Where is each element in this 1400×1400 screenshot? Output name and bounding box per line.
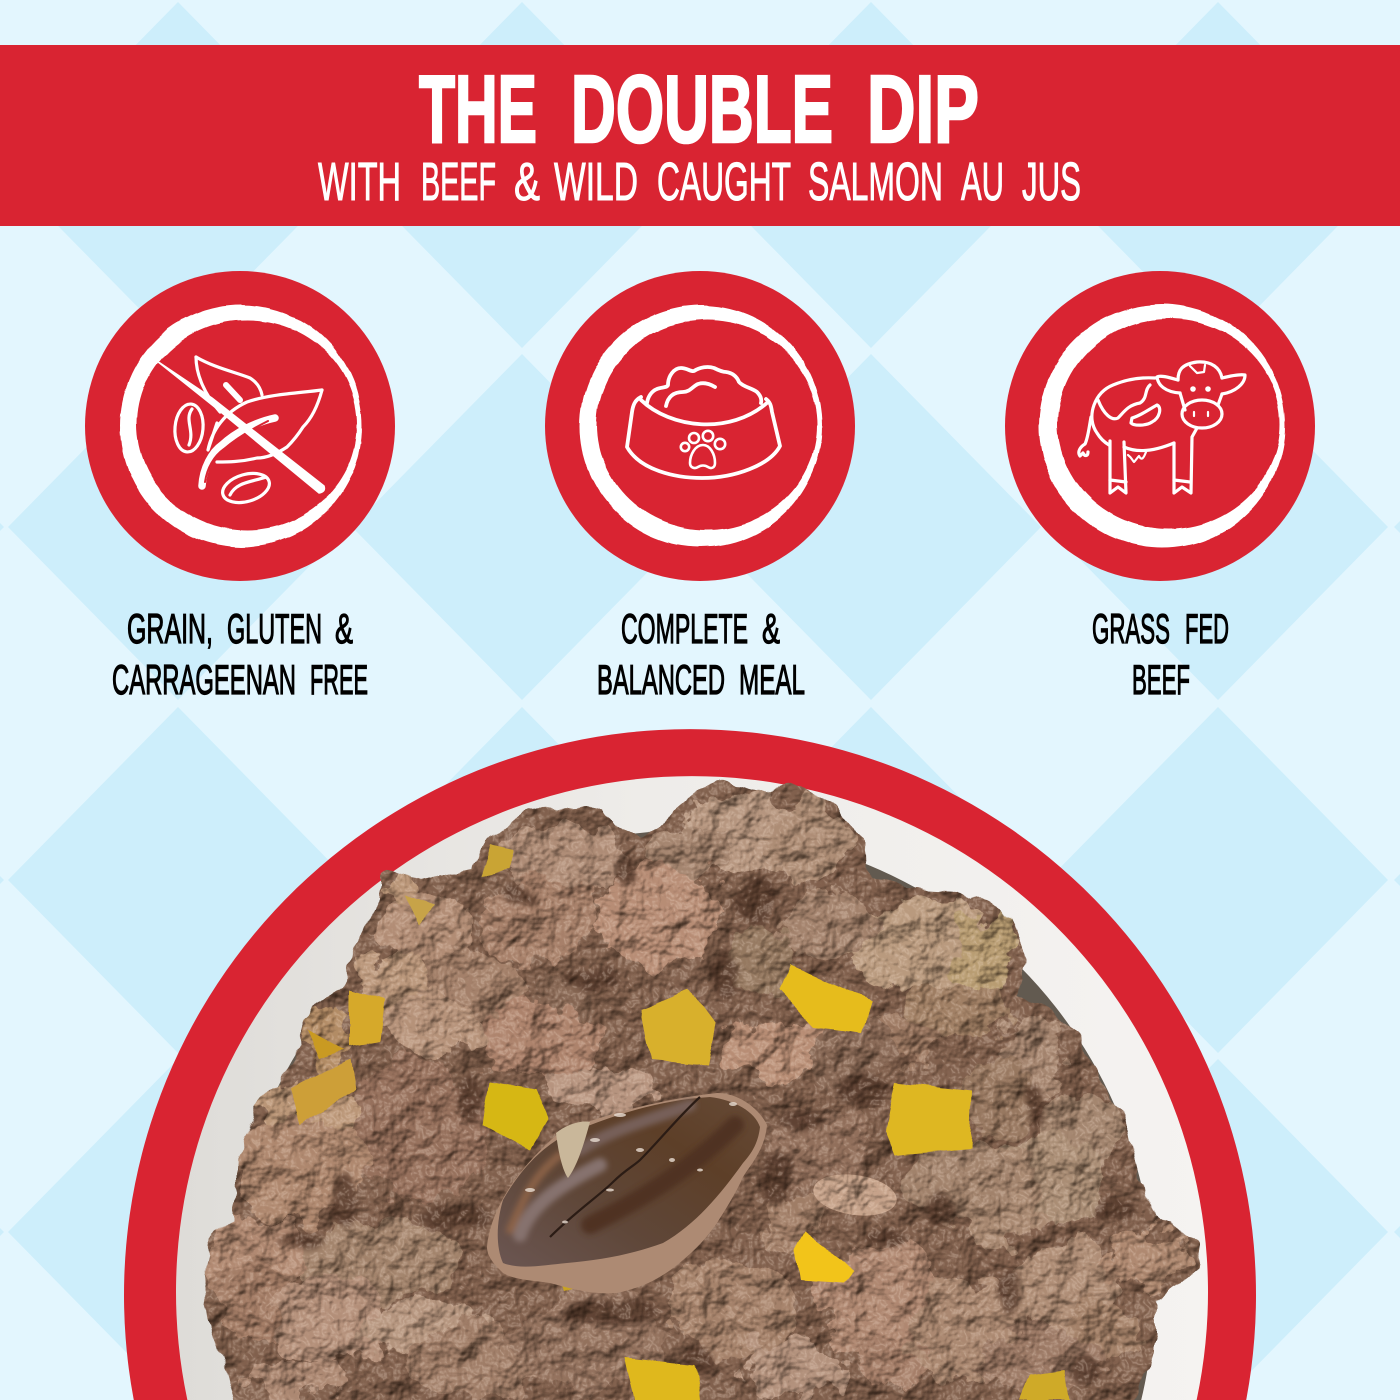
subtitle: AU (961, 152, 1004, 212)
food: wet gloss (200, 780, 1200, 1400)
food: warm tone wash (200, 780, 1200, 1400)
caption: COMPLETE (621, 605, 748, 652)
feature: grass fed beef (1005, 271, 1315, 703)
title: DIP (867, 56, 979, 163)
food: pale chunk (813, 1174, 897, 1216)
icon: food bowl with paw (627, 367, 780, 478)
food: yellow squash pieces (290, 845, 1070, 1400)
subtitle (318, 152, 1081, 212)
bowl inner shadow (230, 830, 1154, 1400)
caption: MEAL (739, 656, 805, 703)
food: dark crevices (275, 854, 1137, 1384)
icon: diagonal strike (157, 361, 324, 493)
title: THE (419, 56, 537, 163)
title: DOUBLE (571, 56, 833, 163)
caption: BEEF (1132, 656, 1190, 703)
subtitle: SALMON (808, 152, 943, 212)
feature: grain, gluten and carrageenan free (85, 271, 395, 703)
caption: & (335, 605, 353, 652)
caption: GRASS (1092, 605, 1170, 652)
subtitle: WITH (318, 152, 401, 212)
subtitle: JUS (1022, 152, 1081, 212)
badge circle (1005, 271, 1315, 581)
food: lumpy surface shading (200, 780, 1200, 1400)
caption: CARRAGEENAN (112, 656, 296, 703)
food bowl illustration (124, 729, 1256, 1400)
badge circle (85, 271, 395, 581)
caption: GRAIN, (127, 605, 213, 652)
caption: FED (1185, 605, 1229, 652)
food: meat chunks (210, 793, 1190, 1400)
caption (597, 605, 805, 703)
header banner (0, 45, 1400, 226)
brush ring (120, 305, 362, 547)
subtitle: & (514, 152, 540, 212)
badge circle (545, 271, 855, 581)
brush ring (1039, 304, 1285, 548)
caption (1092, 605, 1229, 703)
feature: complete and balanced meal (545, 271, 855, 703)
red plate ring (124, 729, 1256, 1400)
subtitle: CAUGHT (657, 152, 791, 212)
icon: crossed-out leaves and grains (173, 357, 322, 508)
white ceramic bowl rim (176, 776, 1208, 1400)
subtitle: BEEF (421, 152, 496, 212)
subtitle: WILD (554, 152, 638, 212)
food: masked meat mass (180, 760, 1220, 1400)
caption: FREE (310, 656, 368, 703)
brush ring (580, 305, 822, 547)
icon: cow (1079, 362, 1245, 493)
food: mushroom slice (487, 1093, 767, 1293)
caption: BALANCED (597, 656, 725, 703)
caption: GLUTEN (227, 605, 322, 652)
caption: & (762, 605, 780, 652)
caption (112, 605, 368, 703)
